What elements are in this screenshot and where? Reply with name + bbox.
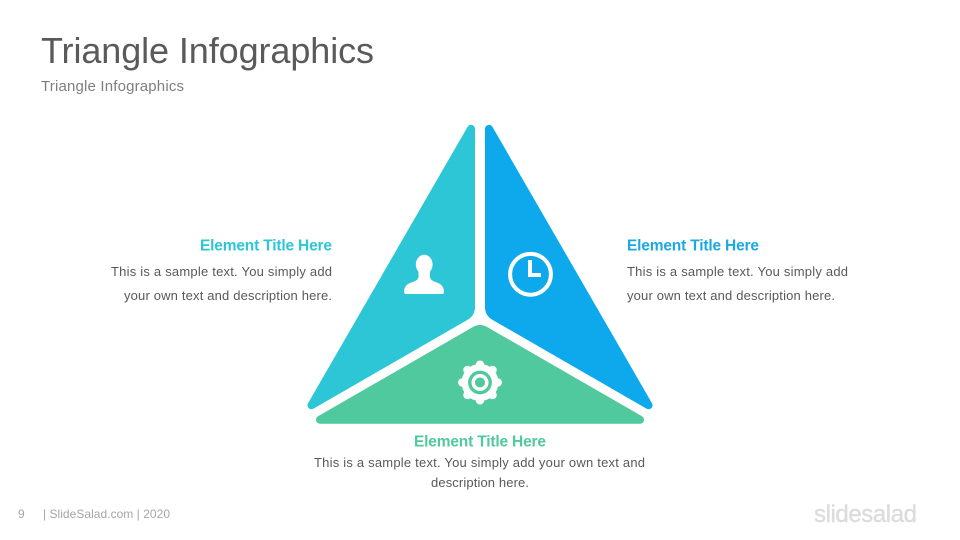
text block: right element: [627, 238, 848, 303]
text block: left element: [111, 238, 332, 303]
body: right line 1: This is a sample text. You simply add: [627, 264, 848, 279]
heading: left element title: Element Title Here: [200, 238, 332, 254]
body: bottom line 2: description here.: [431, 475, 529, 490]
text block: bottom element: [314, 434, 645, 490]
triangle diagram: [312, 129, 648, 420]
body: bottom line 1: This is a sample text. You simply add your own text and: [314, 455, 645, 470]
panel: left teal segment: [312, 129, 471, 405]
body: left line 2: your own text and description here.: [124, 288, 332, 303]
heading: bottom element title: Element Title Here: [414, 434, 546, 450]
footer source: | SlideSalad.com | 2020: [43, 507, 170, 521]
panel: right blue segment: [489, 129, 648, 405]
icon: gear: [462, 364, 498, 401]
body: right line 2: your own text and description here.: [627, 288, 835, 303]
title: Triangle Infographics: [41, 30, 374, 71]
panel: bottom green segment: [320, 329, 640, 420]
subtitle: Triangle Infographics: [41, 78, 184, 95]
logo wordmark: slidesalad: [814, 501, 917, 528]
body: left line 1: This is a sample text. You simply add: [111, 264, 332, 279]
footer page number: 9: [18, 507, 25, 521]
heading: right element title: Element Title Here: [627, 238, 759, 254]
icon: clock: [510, 254, 551, 295]
icon: person: [404, 255, 444, 294]
